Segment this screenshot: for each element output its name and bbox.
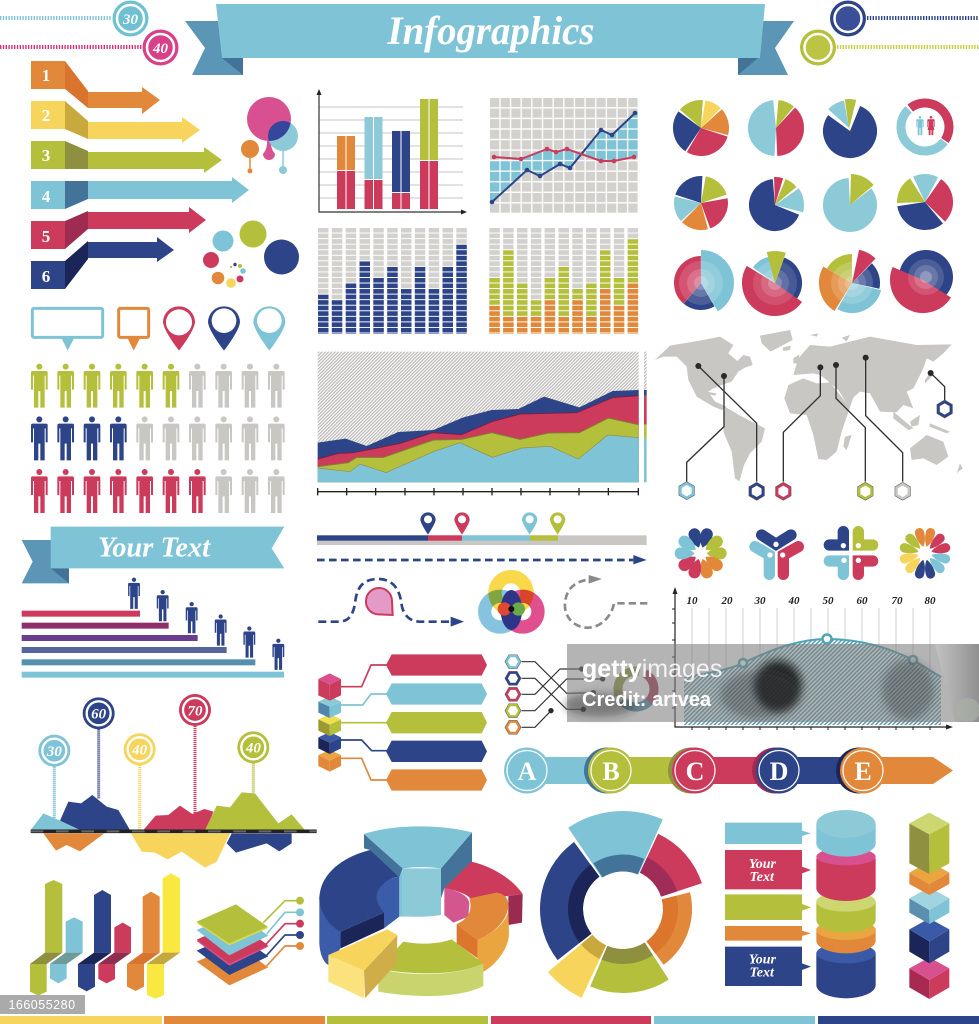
pin badges (38, 694, 269, 767)
radial pie 3 (829, 260, 875, 306)
chart axis labels: 60 (856, 595, 868, 607)
pie 1 (681, 108, 721, 148)
green and orange segmented bar chart (489, 228, 638, 334)
orange segment (457, 893, 509, 972)
numbered arrows: 5 (42, 227, 50, 246)
blob diagram (241, 97, 298, 174)
lower peaks (43, 833, 292, 868)
chart axis labels: 20 (720, 595, 733, 607)
watermark overlay (564, 644, 979, 722)
icon: light blue pin (253, 306, 285, 351)
stacked cylinder (816, 810, 876, 998)
chart axis labels: 40 (788, 595, 800, 607)
pie charts row 2 (682, 182, 945, 225)
pie charts row 1 (681, 93, 959, 161)
dashed arrow (317, 555, 647, 564)
cubes (318, 673, 341, 772)
icon: flower two (755, 535, 798, 574)
isometric cube tower (909, 813, 949, 999)
icon: flower four (899, 527, 951, 580)
numbered arrows: 3 (42, 146, 50, 165)
pie charts row 3: radial (679, 250, 953, 306)
icon: square speech box (119, 308, 149, 351)
callout text (749, 857, 776, 885)
line chart on cell grid (490, 98, 638, 214)
watermark overlay: Credit: artvea (582, 689, 712, 711)
timeline with pins (317, 512, 647, 545)
isometric folded bars (30, 873, 180, 999)
image id tag (0, 995, 85, 1014)
letter band A to E: D (770, 757, 788, 786)
world map with location markers (655, 330, 963, 501)
text callouts: Text (749, 966, 775, 981)
title ribbon (185, 4, 794, 75)
pie 3 (829, 108, 869, 149)
chart axis labels: 80 (924, 595, 936, 607)
pie 6 (755, 185, 795, 225)
letter band A to E: C (686, 757, 704, 786)
hex label bars (386, 654, 487, 791)
chart axis labels: 10 (686, 595, 698, 607)
pie 2 (756, 108, 796, 148)
letter band A to E: E (854, 757, 872, 786)
navy segmented bar chart (318, 228, 467, 334)
callout text: Your (749, 857, 776, 872)
pin badges: 40 (245, 741, 261, 757)
circles cluster (203, 220, 299, 288)
text callouts (725, 823, 811, 986)
pin badges: 60 (91, 707, 107, 723)
gray dashed return arrow (565, 575, 647, 628)
letter band A to E: B (602, 757, 620, 786)
top left markers 30 and 40: 30 (122, 12, 138, 28)
top left markers 30 and 40 (0, 0, 178, 66)
icon: flower one (675, 527, 727, 580)
Your Text ribbon (22, 527, 284, 583)
curved dashed path with drop (318, 579, 464, 627)
pin badges: 30 (46, 744, 62, 760)
title text: Infographics (387, 8, 594, 53)
icon: wide speech box (32, 308, 103, 351)
pie 5 (682, 184, 720, 222)
mountain chart with pins (31, 694, 317, 868)
letter band A to E: A (518, 757, 537, 786)
stacked plates with connectors (197, 897, 304, 985)
yellow segment (328, 929, 397, 998)
top left markers 30 and 40: 40 (152, 41, 168, 57)
top right markers (800, 0, 979, 66)
watermark overlay: gettyimages (582, 655, 722, 683)
icon: flower three (829, 532, 873, 574)
3D exploded donut (319, 826, 523, 998)
footer colour bars (0, 1016, 979, 1024)
callout and pin icons (32, 306, 285, 351)
connectors (341, 665, 387, 780)
radial pie 2 (752, 260, 798, 306)
map connectors (687, 358, 945, 482)
green cube (909, 813, 949, 874)
map land masses (655, 330, 963, 484)
green segment (378, 939, 483, 996)
light blue segment (364, 826, 472, 917)
map hexagon markers (679, 400, 953, 501)
flower icons (675, 527, 951, 580)
pin badges: 70 (188, 703, 203, 719)
chart axis labels: 30 (754, 595, 766, 607)
numbered arrows: 6 (42, 267, 50, 286)
red cube (909, 957, 949, 999)
letter band A to E (504, 748, 953, 794)
icon: timeline pins (420, 512, 565, 535)
flat segmented donut (529, 815, 717, 1003)
icon: red pin (163, 306, 195, 351)
icon: navy pin (208, 306, 240, 351)
navy segment (319, 850, 402, 965)
numbered arrows (31, 61, 249, 289)
chart gridlines (692, 608, 930, 727)
staircase bars with people (22, 578, 284, 678)
upper peaks (31, 792, 305, 830)
radial pie 1 (679, 261, 723, 305)
light blue cube (909, 887, 949, 924)
chart axis labels: 70 (892, 595, 903, 607)
hatched curve chart (672, 587, 953, 730)
pie 4: donut with people (891, 93, 959, 161)
pie 8 (905, 182, 945, 222)
people pictogram rows (31, 364, 285, 513)
callout text: Text (749, 870, 775, 885)
pin badges: 40 (131, 743, 148, 759)
numbered arrows: 4 (42, 187, 51, 206)
chart axis labels (686, 595, 936, 607)
hexagon network (505, 654, 605, 735)
chart axis labels: 50 (822, 595, 834, 607)
numbered arrows: 2 (42, 106, 50, 125)
radial pie 4 (899, 250, 953, 304)
navy cube (909, 918, 949, 963)
image id tag: 166055280 (8, 998, 76, 1012)
orange cube (909, 862, 949, 895)
text callouts: Your (749, 952, 776, 967)
pie 7 (831, 186, 869, 224)
numbered arrows: 1 (42, 66, 50, 85)
cube stack with hex labels (318, 654, 487, 791)
dotted pin lines (54, 726, 253, 832)
stacked bar chart (316, 89, 467, 214)
Your Text ribbon: Your Text (98, 533, 211, 564)
stacked area chart (318, 352, 647, 495)
venn diagram (485, 577, 538, 630)
red segment (444, 862, 523, 925)
